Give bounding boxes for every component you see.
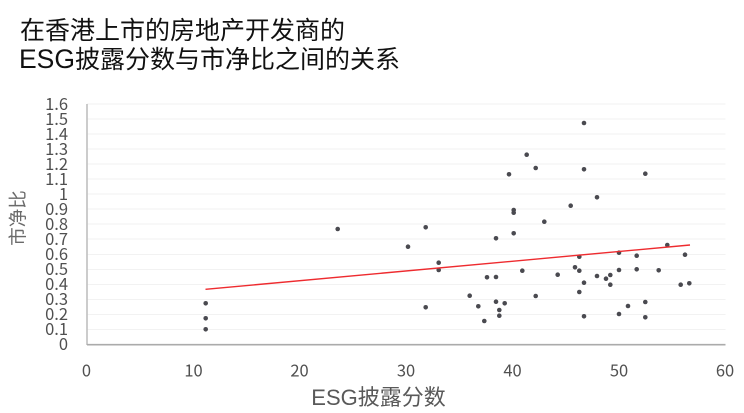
y axis tick labels: 0.3 (45, 286, 68, 310)
title: 在香港上市的房地产开发商的 (20, 17, 345, 45)
y axis line (86, 104, 88, 345)
title (19, 17, 400, 74)
y axis tick labels: 0 (59, 331, 68, 355)
x axis tick labels: 20 (290, 358, 309, 382)
x axis tick labels (82, 358, 734, 382)
y axis tick labels: 0.2 (45, 301, 68, 325)
y axis tick labels: 0.6 (45, 241, 68, 265)
title: ESG披露分数与市净比之间的关系 (19, 44, 400, 74)
y axis tick labels: 1 (59, 181, 68, 205)
x axis tick labels: 60 (716, 358, 734, 382)
x axis tick labels: 10 (184, 358, 203, 382)
y axis tick labels: 0.7 (45, 226, 68, 250)
x axis tick labels: 30 (397, 358, 415, 382)
x axis tick labels: 40 (503, 358, 522, 382)
x axis title: ESG披露分数 (311, 385, 446, 410)
x axis tick labels: 0 (82, 358, 91, 382)
x axis line (87, 344, 726, 346)
y axis tick labels: 1.1 (45, 166, 68, 190)
data points (203, 121, 692, 332)
y axis tick labels: 1.4 (45, 121, 68, 145)
y axis tick labels: 0.4 (45, 271, 68, 295)
y axis title: 市净比 (4, 190, 30, 246)
trend line (206, 245, 690, 289)
y axis tick labels: 1.5 (45, 106, 68, 130)
y axis tick labels (45, 91, 68, 355)
y axis tick labels: 1.2 (45, 151, 68, 175)
y axis tick labels: 0.5 (45, 256, 68, 280)
scatter chart (4, 91, 734, 410)
x axis tick labels: 50 (610, 358, 628, 382)
y axis tick labels: 1.6 (45, 91, 68, 115)
y axis tick labels: 0.8 (45, 211, 68, 235)
y axis tick labels: 0.1 (45, 316, 68, 340)
y axis tick labels: 0.9 (45, 196, 68, 220)
y axis tick labels: 1.3 (45, 136, 68, 160)
